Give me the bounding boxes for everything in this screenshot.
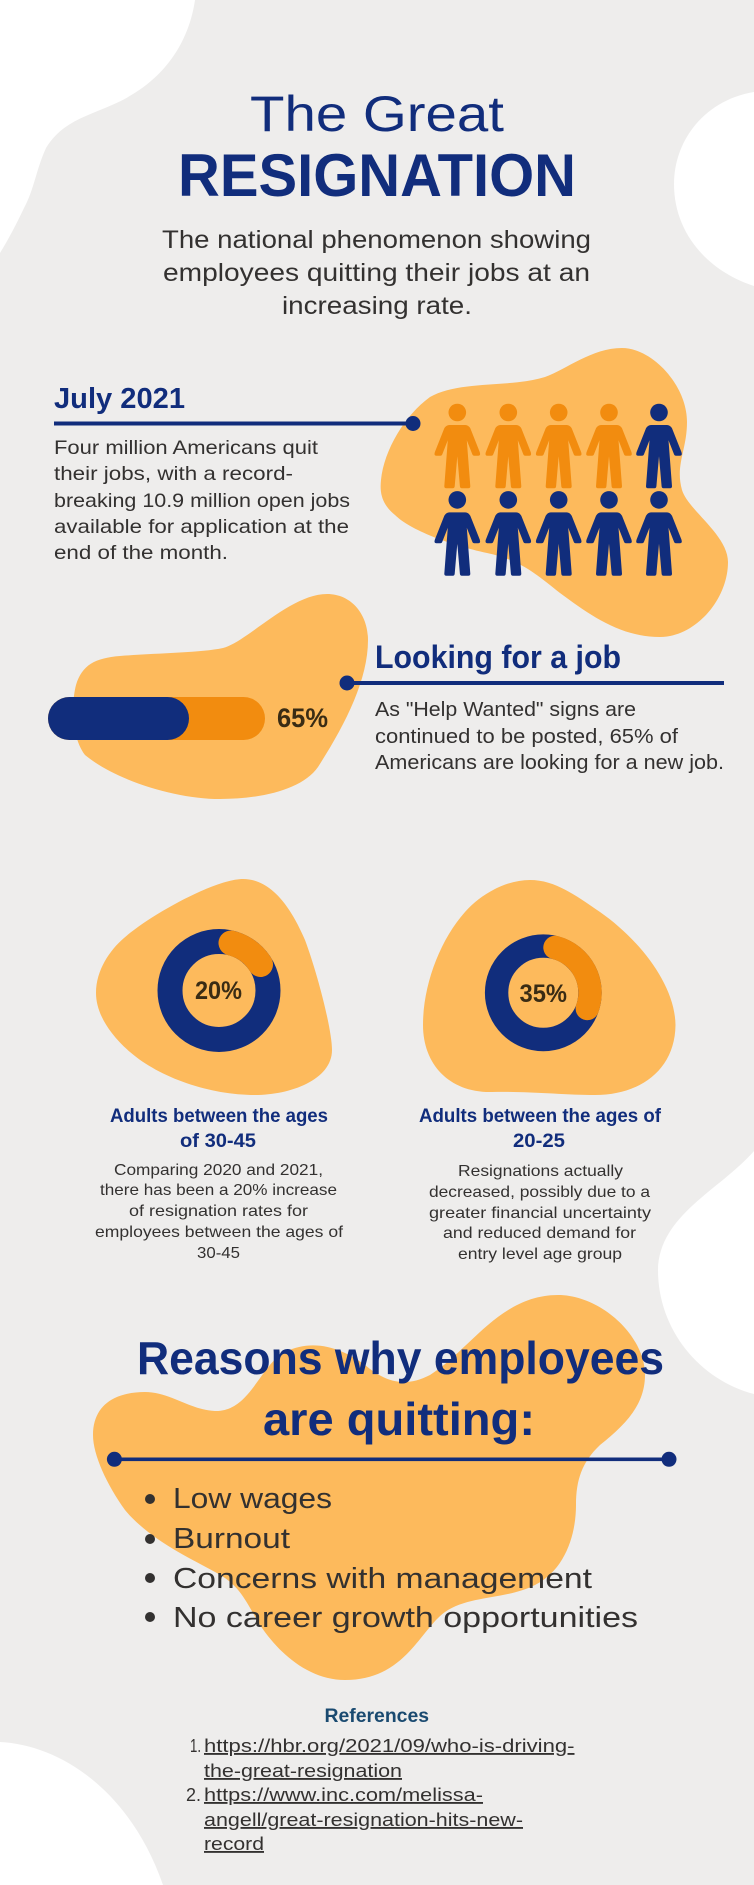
reference list: angell/great-resignation-hits-new- [204, 1809, 523, 1830]
white blob: top left [0, 0, 195, 253]
bullet list: reasons [145, 1483, 638, 1634]
panel: ages 30-45 blob [96, 879, 332, 1095]
subtitle: increasing rate. [282, 292, 472, 320]
white blob: bottom left [0, 1742, 163, 1885]
heading: adults 30-45: Adults between the ages [110, 1106, 328, 1127]
panel: ages 20-25 blob [423, 880, 676, 1095]
connector line with dot [54, 416, 420, 431]
text block: looking for a job: continued to be posted, 65% of [375, 726, 678, 748]
heading: adults 20-25: Adults between the ages of [419, 1106, 662, 1127]
heading: adults 30-45 [110, 1106, 328, 1152]
label: 20%: 20% [195, 977, 242, 1005]
panel: reasons blob [93, 1295, 645, 1680]
heading: Looking for a job: Looking for a job [375, 639, 621, 675]
text block: July 2021: their jobs, with a record- [54, 463, 293, 485]
heading: adults 30-45: of 30-45 [180, 1131, 256, 1152]
reference list: record [204, 1833, 264, 1854]
reference list: the-great-resignation [204, 1760, 402, 1781]
label: 65%: 65% [277, 703, 328, 733]
heading: adults 20-25 [419, 1106, 662, 1152]
icon: ten people, four highlighted [435, 404, 682, 576]
text block: adults 30-45: employees between the ages of [95, 1224, 344, 1241]
text block: adults 20-25: entry level age group [458, 1246, 622, 1263]
bullet list: reasons: Burnout [173, 1523, 290, 1555]
subtitle: employees quitting their jobs at an [163, 259, 590, 287]
text block: looking for a job: Americans are looking for a new job. [375, 752, 724, 774]
text block: adults 30-45 [95, 1162, 344, 1262]
text block: July 2021: breaking 10.9 million open jobs [54, 490, 350, 512]
text block: adults 20-25: decreased, possibly due to a [429, 1184, 650, 1201]
reference list: 2. [186, 1784, 201, 1805]
donut chart: 35% [497, 946, 590, 1040]
text block: July 2021: end of the month. [54, 542, 228, 564]
text block: looking for a job: As "Help Wanted" signs are [375, 699, 636, 721]
white blob: lower right [658, 1151, 754, 1394]
text block: July 2021: Four million Americans quit [54, 437, 319, 459]
progress bar 65% [48, 697, 265, 740]
text block: looking for a job [375, 699, 724, 774]
text block: adults 30-45: of resignation rates for [129, 1203, 309, 1220]
title: RESIGNATION [178, 142, 576, 209]
heading: reasons [137, 1332, 664, 1445]
bullet list: reasons: Concerns with management [173, 1563, 592, 1595]
title: The Great [250, 86, 504, 142]
panel: July 2021 people blob [381, 348, 728, 637]
heading: adults 20-25: 20-25 [513, 1131, 565, 1152]
divider line with end dots [107, 1452, 676, 1467]
subtitle: The national phenomenon showing [162, 226, 591, 254]
text block: adults 20-25: and reduced demand for [443, 1225, 637, 1242]
reference list [186, 1735, 574, 1854]
donut chart: 20% [170, 942, 268, 1040]
text block: adults 30-45: Comparing 2020 and 2021, [114, 1162, 323, 1179]
reference list: https://www.inc.com/melissa- [204, 1784, 483, 1805]
label: 35%: 35% [520, 980, 567, 1008]
heading: references: References [324, 1706, 429, 1727]
heading: July 2021: July 2021 [54, 383, 185, 415]
text block: July 2021 [54, 437, 350, 564]
text block: adults 30-45: 30-45 [197, 1245, 240, 1262]
reference list: 1. [190, 1735, 201, 1756]
panel: looking for a job blob [73, 594, 368, 799]
connector line with dot [340, 676, 724, 690]
text block: adults 20-25: Resignations actually [458, 1163, 623, 1180]
heading: reasons: are quitting: [263, 1393, 535, 1445]
text block: adults 20-25 [429, 1163, 651, 1263]
text block: July 2021: available for application at the [54, 516, 349, 538]
reference list: https://hbr.org/2021/09/who-is-driving- [204, 1735, 574, 1756]
bullet list: reasons: No career growth opportunities [173, 1602, 638, 1634]
white blob: top right [674, 92, 754, 286]
bullet list: reasons: Low wages [173, 1483, 332, 1515]
text block: adults 30-45: there has been a 20% increase [100, 1182, 337, 1199]
text block: adults 20-25: greater financial uncertainty [429, 1205, 651, 1222]
title [178, 86, 576, 209]
subtitle [162, 226, 591, 320]
heading: reasons: Reasons why employees [137, 1332, 664, 1384]
